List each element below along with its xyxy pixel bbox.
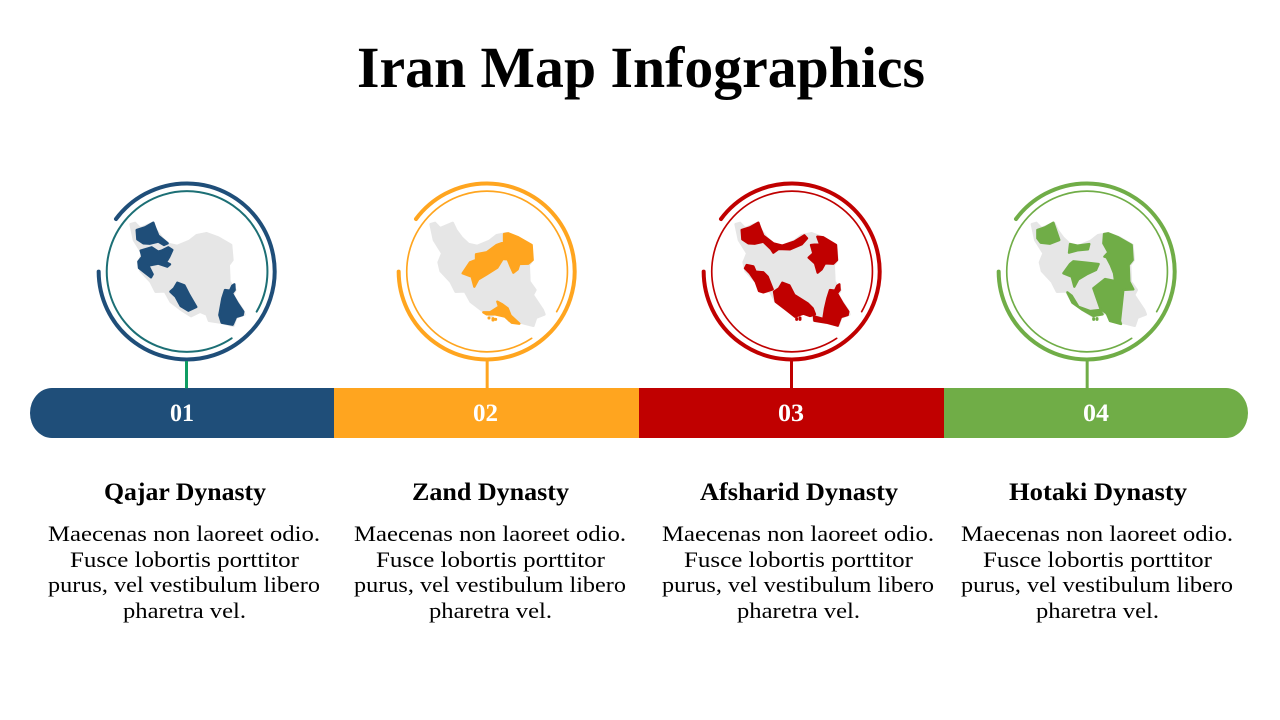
number 01: 01 [170,400,194,427]
heading: Afsharid Dynasty: Afsharid Dynasty [700,479,899,506]
text block: Zand Dynasty [354,479,626,623]
segment 02 [334,388,639,438]
body: Zand Dynasty: Maecenas non laoreet odio. [354,521,626,546]
body: Afsharid Dynasty: purus, vel vestibulum libero [662,572,934,597]
body: Zand Dynasty [354,521,626,623]
text block: Qajar Dynasty [48,479,320,623]
heading: Hotaki Dynasty: Hotaki Dynasty [1009,479,1188,506]
title: Iran Map Infographics [357,35,925,100]
body: Qajar Dynasty: Maecenas non laoreet odio. [48,521,320,546]
body: Zand Dynasty: Fusce lobortis porttitor [376,547,606,572]
body: Hotaki Dynasty: pharetra vel. [1036,598,1159,623]
body: Afsharid Dynasty: pharetra vel. [737,598,860,623]
body: Qajar Dynasty: pharetra vel. [123,598,246,623]
number 04: 04 [1083,400,1110,427]
heading: Zand Dynasty: Zand Dynasty [412,479,570,506]
body: Qajar Dynasty: purus, vel vestibulum libero [48,572,320,597]
number 03: 03 [778,400,804,427]
body: Zand Dynasty: purus, vel vestibulum libero [354,572,626,597]
body: Afsharid Dynasty: Maecenas non laoreet odio. [662,521,934,546]
body: Hotaki Dynasty [961,521,1233,623]
body: Hotaki Dynasty: Maecenas non laoreet odio. [961,521,1233,546]
body: Afsharid Dynasty: Fusce lobortis porttitor [684,547,914,572]
heading: Qajar Dynasty: Qajar Dynasty [104,479,267,506]
number 02: 02 [473,400,498,427]
body: Hotaki Dynasty: Fusce lobortis porttitor [983,547,1213,572]
segment 04 [944,388,1248,438]
body: Afsharid Dynasty [662,521,934,623]
segment 03 [639,388,944,438]
icon: Qajar map in rings [99,183,275,388]
text block: Hotaki Dynasty [961,479,1233,623]
timeline bar [30,388,1248,438]
text block: Afsharid Dynasty [662,479,934,623]
icon: Afsharid map in rings [704,183,880,388]
body: Qajar Dynasty: Fusce lobortis porttitor [70,547,300,572]
icon: Hotaki map in rings [999,183,1175,388]
body: Qajar Dynasty [48,521,320,623]
icon: Zand map in rings [399,183,575,388]
body: Zand Dynasty: pharetra vel. [429,598,552,623]
body: Hotaki Dynasty: purus, vel vestibulum libero [961,572,1233,597]
segment 01 [30,388,334,438]
